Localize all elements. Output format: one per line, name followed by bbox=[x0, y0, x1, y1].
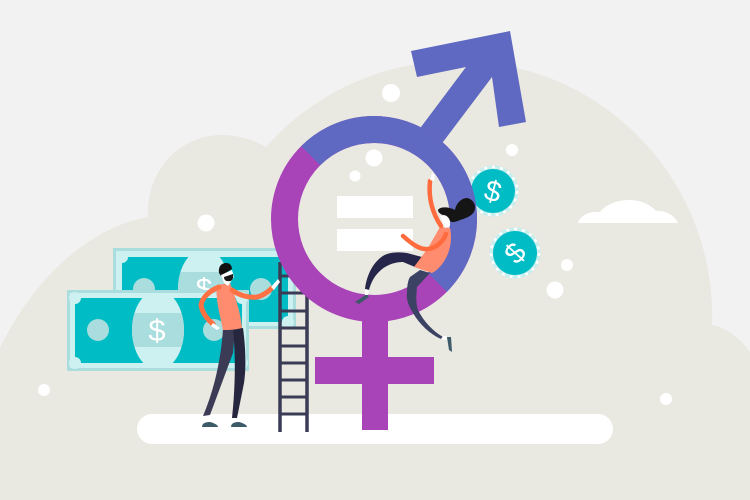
man: shoes bbox=[202, 422, 247, 427]
equals sign bbox=[337, 196, 413, 251]
back banknote bbox=[113, 248, 296, 329]
mars arrow bbox=[411, 31, 526, 150]
cloud bbox=[578, 200, 678, 223]
man: legs bbox=[203, 329, 235, 416]
ring: blue segment bbox=[311, 129, 464, 282]
coin top bbox=[469, 167, 517, 215]
front banknote: $ bbox=[148, 313, 166, 348]
ladder bbox=[280, 262, 307, 432]
woman: rear leg bbox=[365, 252, 422, 290]
man: arms bbox=[201, 287, 272, 324]
woman: hand bbox=[430, 173, 435, 181]
man: head bbox=[219, 263, 232, 276]
coin top: $ bbox=[481, 174, 505, 210]
white dots bbox=[38, 84, 672, 405]
woman climbing figure bbox=[355, 173, 475, 352]
man: torso bbox=[217, 283, 242, 330]
coin bottom bbox=[491, 229, 539, 277]
woman: torso bbox=[414, 227, 451, 273]
woman: feet bbox=[355, 294, 452, 352]
ring: purple segment bbox=[284, 130, 464, 308]
woman: arms bbox=[403, 181, 446, 249]
ground bbox=[137, 414, 613, 444]
back banknote: $ bbox=[196, 273, 213, 306]
venus symbol stem bbox=[315, 315, 434, 430]
woman: head and hair bbox=[440, 215, 450, 228]
man: hands bbox=[211, 279, 280, 330]
man climbing figure bbox=[201, 263, 280, 427]
coin bottom: $ bbox=[498, 237, 533, 270]
front banknote bbox=[67, 290, 249, 371]
woman: lead leg bbox=[407, 270, 443, 339]
symbol ring bbox=[284, 129, 464, 308]
